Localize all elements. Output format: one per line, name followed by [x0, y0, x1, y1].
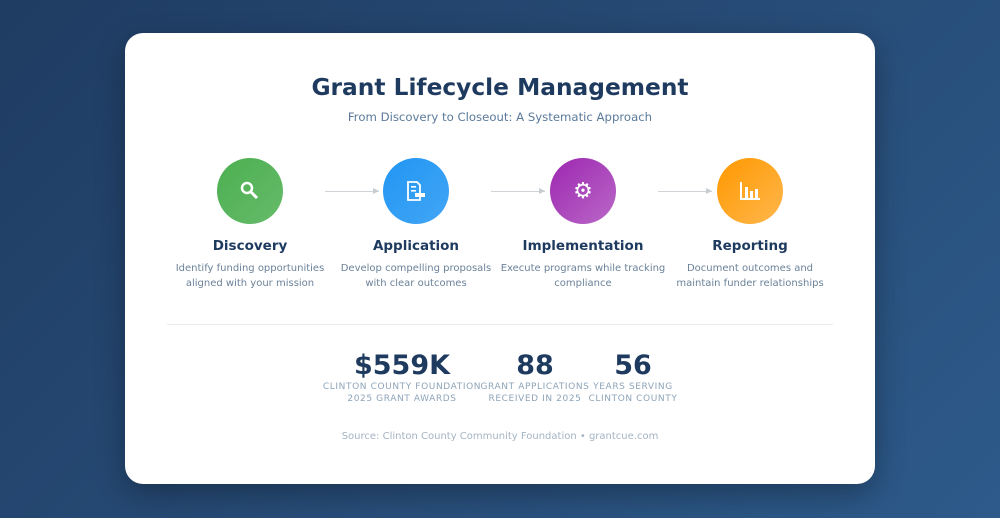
step: discovery: Identify funding opportunities	[176, 263, 324, 274]
step: reporting: maintain funder relationships	[676, 278, 824, 289]
icon: document	[383, 158, 449, 224]
step: discovery: Discovery	[213, 238, 287, 254]
card	[125, 33, 875, 484]
step: application: Application	[373, 238, 459, 254]
stat: years: YEARS SERVING	[593, 382, 673, 392]
stat: awards	[323, 350, 481, 404]
title: Grant Lifecycle Management	[311, 74, 689, 101]
arrow	[325, 191, 379, 192]
stat: applications: GRANT APPLICATIONS	[480, 382, 590, 392]
step: application: with clear outcomes	[365, 278, 467, 289]
step: reporting: Reporting	[712, 238, 788, 254]
stat: years	[589, 350, 677, 404]
step: implementation: Implementation	[523, 238, 643, 254]
arrow	[658, 191, 712, 192]
stat: awards: CLINTON COUNTY FOUNDATION	[323, 382, 481, 392]
stat: applications: RECEIVED IN 2025	[489, 394, 581, 404]
step: discovery	[176, 158, 324, 289]
icon: gear	[550, 158, 616, 224]
step: implementation: Execute programs while tracking	[501, 263, 665, 274]
source: Source: Clinton County Community Foundation • grantcue.com	[342, 431, 658, 442]
icon: chart	[717, 158, 783, 224]
stat: years: 56	[614, 350, 652, 381]
subtitle: From Discovery to Closeout: A Systematic Approach	[348, 110, 652, 124]
stat: awards: 2025 GRANT AWARDS	[347, 394, 457, 404]
step: application: Develop compelling proposals	[341, 263, 491, 274]
step: implementation	[501, 158, 665, 289]
icon: magnifier	[217, 158, 283, 224]
stat: applications	[480, 350, 590, 404]
arrow	[491, 191, 545, 192]
stat: applications: 88	[516, 350, 554, 381]
step: discovery: aligned with your mission	[186, 278, 314, 289]
step: reporting: Document outcomes and	[687, 263, 813, 274]
step: application	[341, 158, 491, 289]
icon: gear: ⚙	[573, 178, 593, 204]
step: implementation: compliance	[554, 278, 612, 289]
stat: years: CLINTON COUNTY	[589, 394, 677, 404]
step: reporting	[676, 158, 824, 289]
stat: awards: $559K	[354, 350, 450, 381]
